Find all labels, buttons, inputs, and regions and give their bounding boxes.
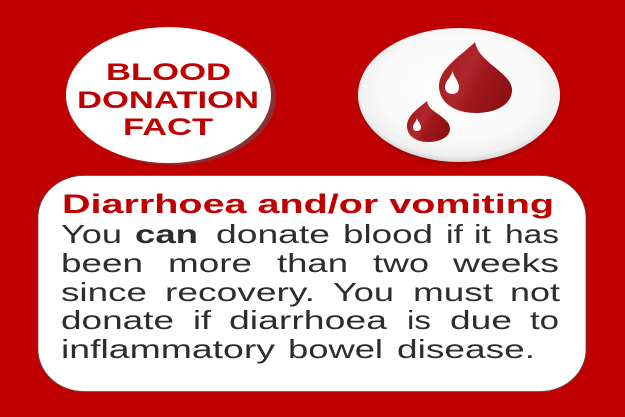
body text: You	[333, 277, 394, 307]
body text: blood	[343, 219, 433, 249]
badge ellipse	[66, 27, 271, 163]
badge title: DONATION	[77, 87, 259, 114]
panel background	[38, 176, 586, 392]
body text: can	[135, 219, 198, 249]
body text: to	[530, 305, 559, 335]
badge: blood donation fact	[66, 27, 276, 165]
body text: if	[446, 219, 464, 249]
body text: inflammatory	[61, 334, 275, 364]
heading: Diarrhoea and/or vomiting	[62, 189, 554, 219]
body text: must	[413, 277, 494, 307]
body text: donate	[61, 305, 174, 335]
body text: more	[168, 248, 252, 278]
body text: not	[510, 277, 561, 307]
body text: recovery.	[165, 277, 315, 307]
body text: if	[193, 305, 212, 335]
icon: glossy button with blood drops	[358, 28, 560, 165]
body text: two	[373, 248, 429, 278]
badge title	[77, 59, 259, 141]
body text: donate	[216, 219, 330, 249]
body text: weeks	[452, 248, 559, 278]
body text: has	[505, 219, 559, 249]
body text: disease.	[397, 334, 535, 364]
icon: small blood drop	[407, 101, 450, 142]
badge title: FACT	[123, 114, 213, 141]
body text: due	[450, 305, 512, 335]
body text: since	[61, 277, 147, 307]
body text: You	[61, 219, 122, 249]
body text: been	[61, 248, 143, 278]
body text: bowel	[288, 334, 383, 364]
badge shadow	[70, 29, 276, 165]
body text: it	[474, 219, 492, 249]
body text	[61, 219, 561, 364]
icon: large blood drop	[439, 42, 512, 113]
panel: fact text	[38, 176, 586, 392]
body text: diarrhoea	[229, 305, 388, 335]
button glow	[358, 31, 560, 165]
body text: is	[407, 305, 431, 335]
badge title: BLOOD	[106, 59, 231, 86]
body text: than	[277, 248, 348, 278]
glossy button	[358, 28, 560, 162]
